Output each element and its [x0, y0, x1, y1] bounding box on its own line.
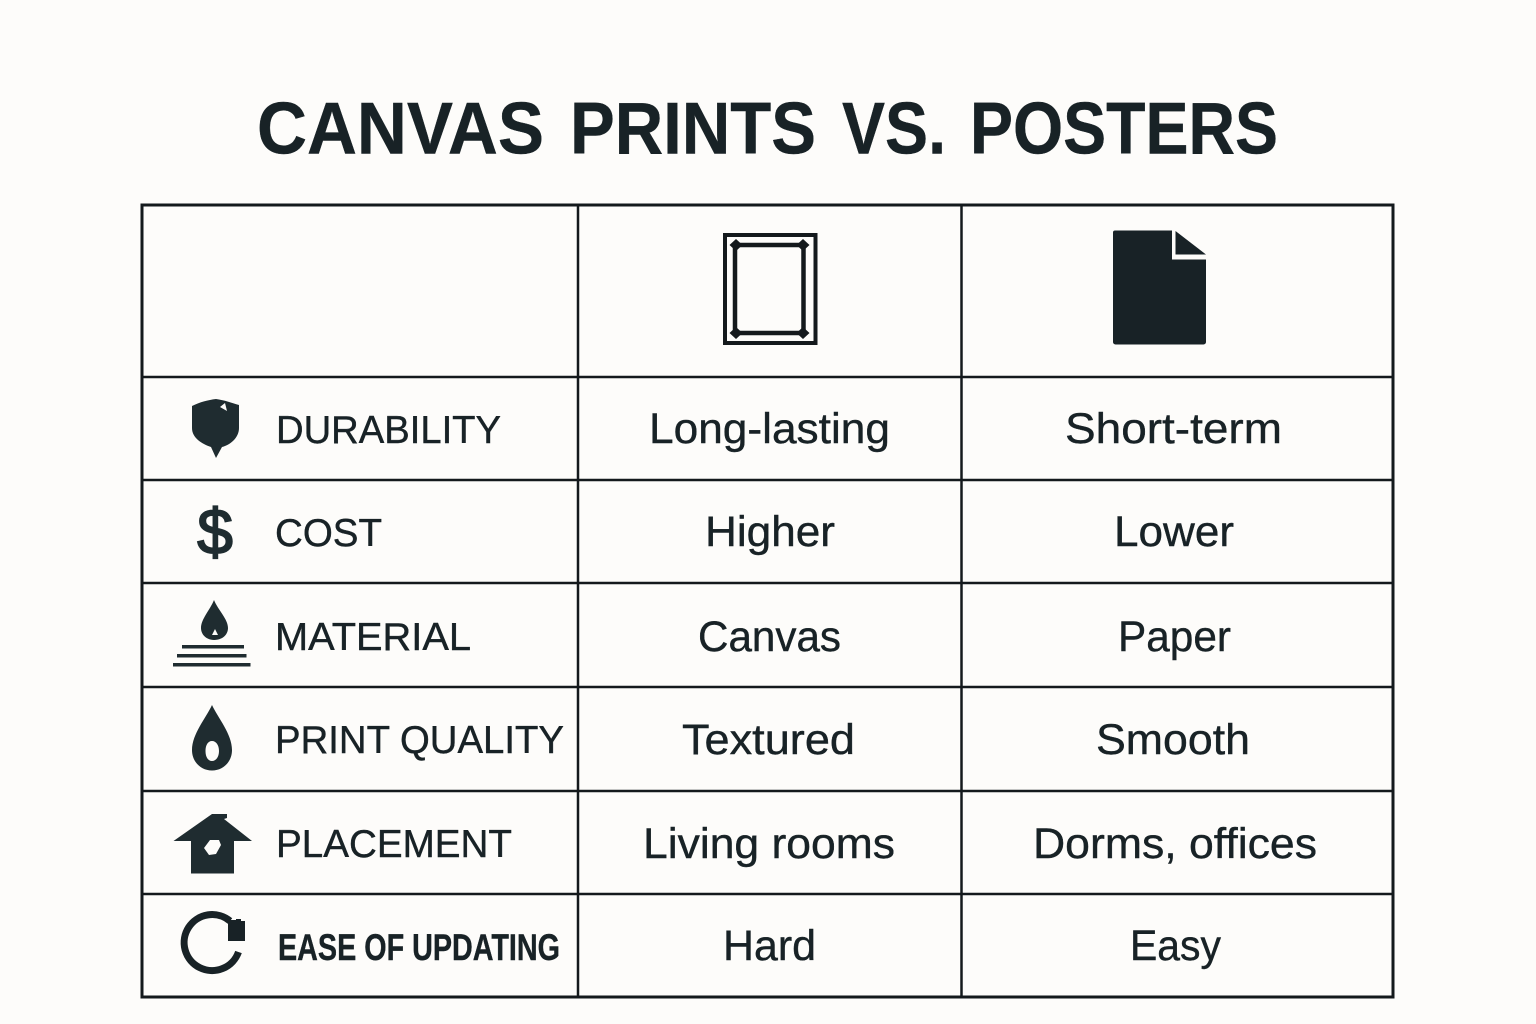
value: canvas material: Canvas — [698, 613, 841, 661]
value: canvas durability: Long-lasting — [649, 405, 890, 453]
title: CANVAS — [257, 88, 544, 170]
icon: ink drop — [192, 705, 232, 770]
row: placement — [174, 814, 1317, 874]
comparison table — [142, 205, 1393, 997]
icon: poster sheet — [1113, 230, 1206, 344]
row: cost — [197, 496, 1234, 568]
row: ease of updating — [184, 915, 1221, 971]
value: poster ease of updating: Easy — [1130, 922, 1221, 970]
label: placement: PLACEMENT — [276, 823, 512, 866]
value: poster placement: Dorms, offices — [1033, 820, 1317, 868]
title: POSTERS — [970, 88, 1278, 170]
icon: refresh arrow — [184, 915, 245, 971]
value: canvas print quality: Textured — [682, 716, 855, 764]
label: cost: COST — [275, 512, 382, 555]
icon: canvas frame — [725, 235, 816, 343]
label: durability: DURABILITY — [276, 409, 501, 452]
value: canvas ease of updating: Hard — [723, 922, 816, 970]
row: durability — [192, 399, 1282, 458]
value: canvas placement: Living rooms — [643, 820, 895, 868]
title: PRINTS — [570, 88, 816, 170]
icon: house — [174, 814, 252, 874]
icon: shield — [192, 399, 239, 458]
value: poster durability: Short-term — [1065, 405, 1282, 453]
label: material: MATERIAL — [275, 616, 471, 659]
row: print quality — [192, 705, 1250, 770]
value: canvas cost: Higher — [705, 508, 835, 556]
label: print quality: PRINT QUALITY — [275, 719, 564, 762]
row: material — [173, 600, 1231, 666]
value: poster print quality: Smooth — [1096, 716, 1250, 764]
value: poster cost: Lower — [1114, 508, 1234, 556]
title: VS. — [842, 88, 946, 170]
icon: dollar sign: $ — [197, 496, 233, 568]
value: poster material: Paper — [1118, 613, 1231, 661]
label: ease of updating: EASE OF UPDATING — [278, 927, 560, 968]
icon: drop over layers — [173, 600, 250, 666]
